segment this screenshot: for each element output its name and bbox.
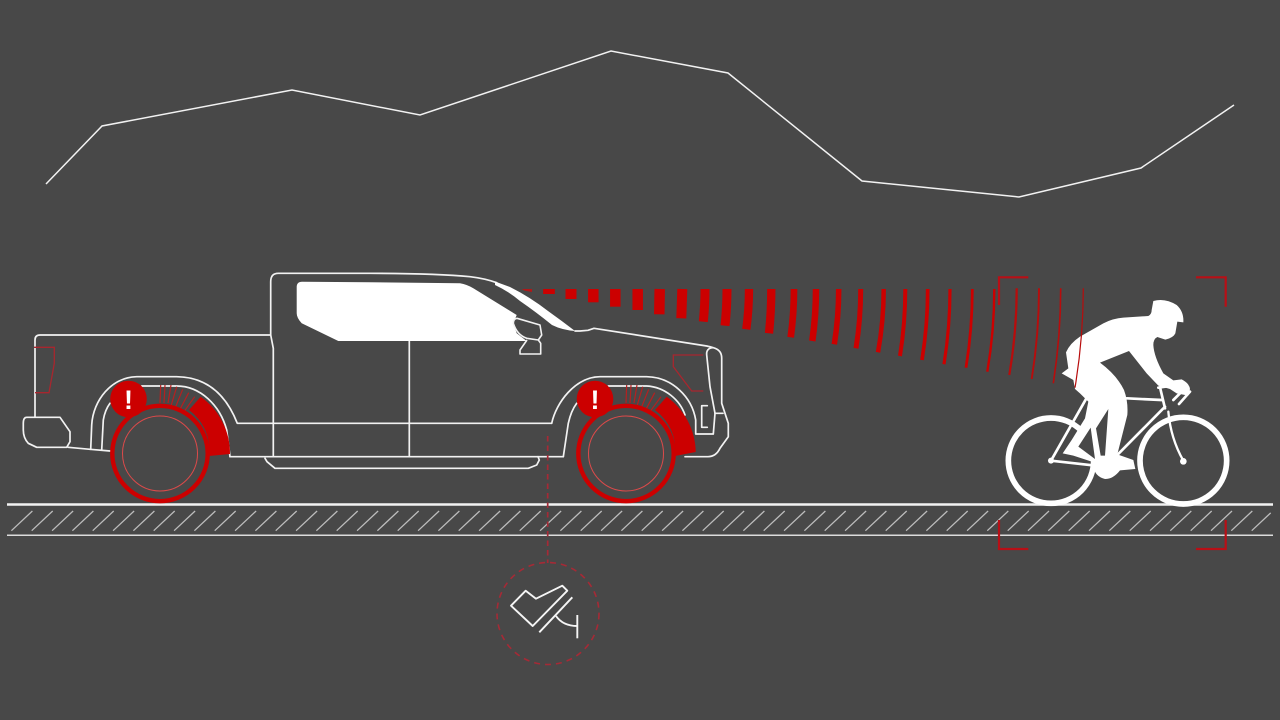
rider silhouette <box>1062 300 1190 479</box>
truck body outline <box>23 273 728 468</box>
truck <box>23 273 728 468</box>
front head light <box>673 355 703 391</box>
front wheel with brake warning <box>577 381 696 501</box>
icon: brake pedal <box>497 562 599 664</box>
rear red wheel arch sector <box>189 397 230 456</box>
rear arch ticks <box>160 385 195 412</box>
front warning badge: ! <box>590 385 600 415</box>
bicycle hub <box>1180 458 1187 465</box>
dashed connector to brake icon <box>547 436 549 563</box>
rear warning badge: ! <box>124 385 133 415</box>
gaps between legs <box>1078 409 1108 459</box>
detection frame <box>999 277 1226 549</box>
side mirror <box>513 318 542 354</box>
front arch ticks <box>626 385 661 412</box>
bicycle frame <box>1051 386 1190 467</box>
rear hub <box>122 416 198 491</box>
cyclist <box>1008 300 1227 504</box>
radar beam <box>522 288 1083 388</box>
rear tail light <box>34 347 54 393</box>
mountain horizon line <box>46 51 1234 197</box>
windshield strip <box>495 282 575 331</box>
road <box>7 504 1273 535</box>
side window <box>297 282 527 341</box>
front hub <box>588 416 664 491</box>
rear tire <box>112 406 208 501</box>
rear wheel with brake warning <box>110 381 230 501</box>
bicycle wheels <box>1008 417 1227 504</box>
rear hub joint <box>1048 458 1054 464</box>
front red wheel arch sector <box>655 397 696 456</box>
front tire <box>578 406 674 501</box>
